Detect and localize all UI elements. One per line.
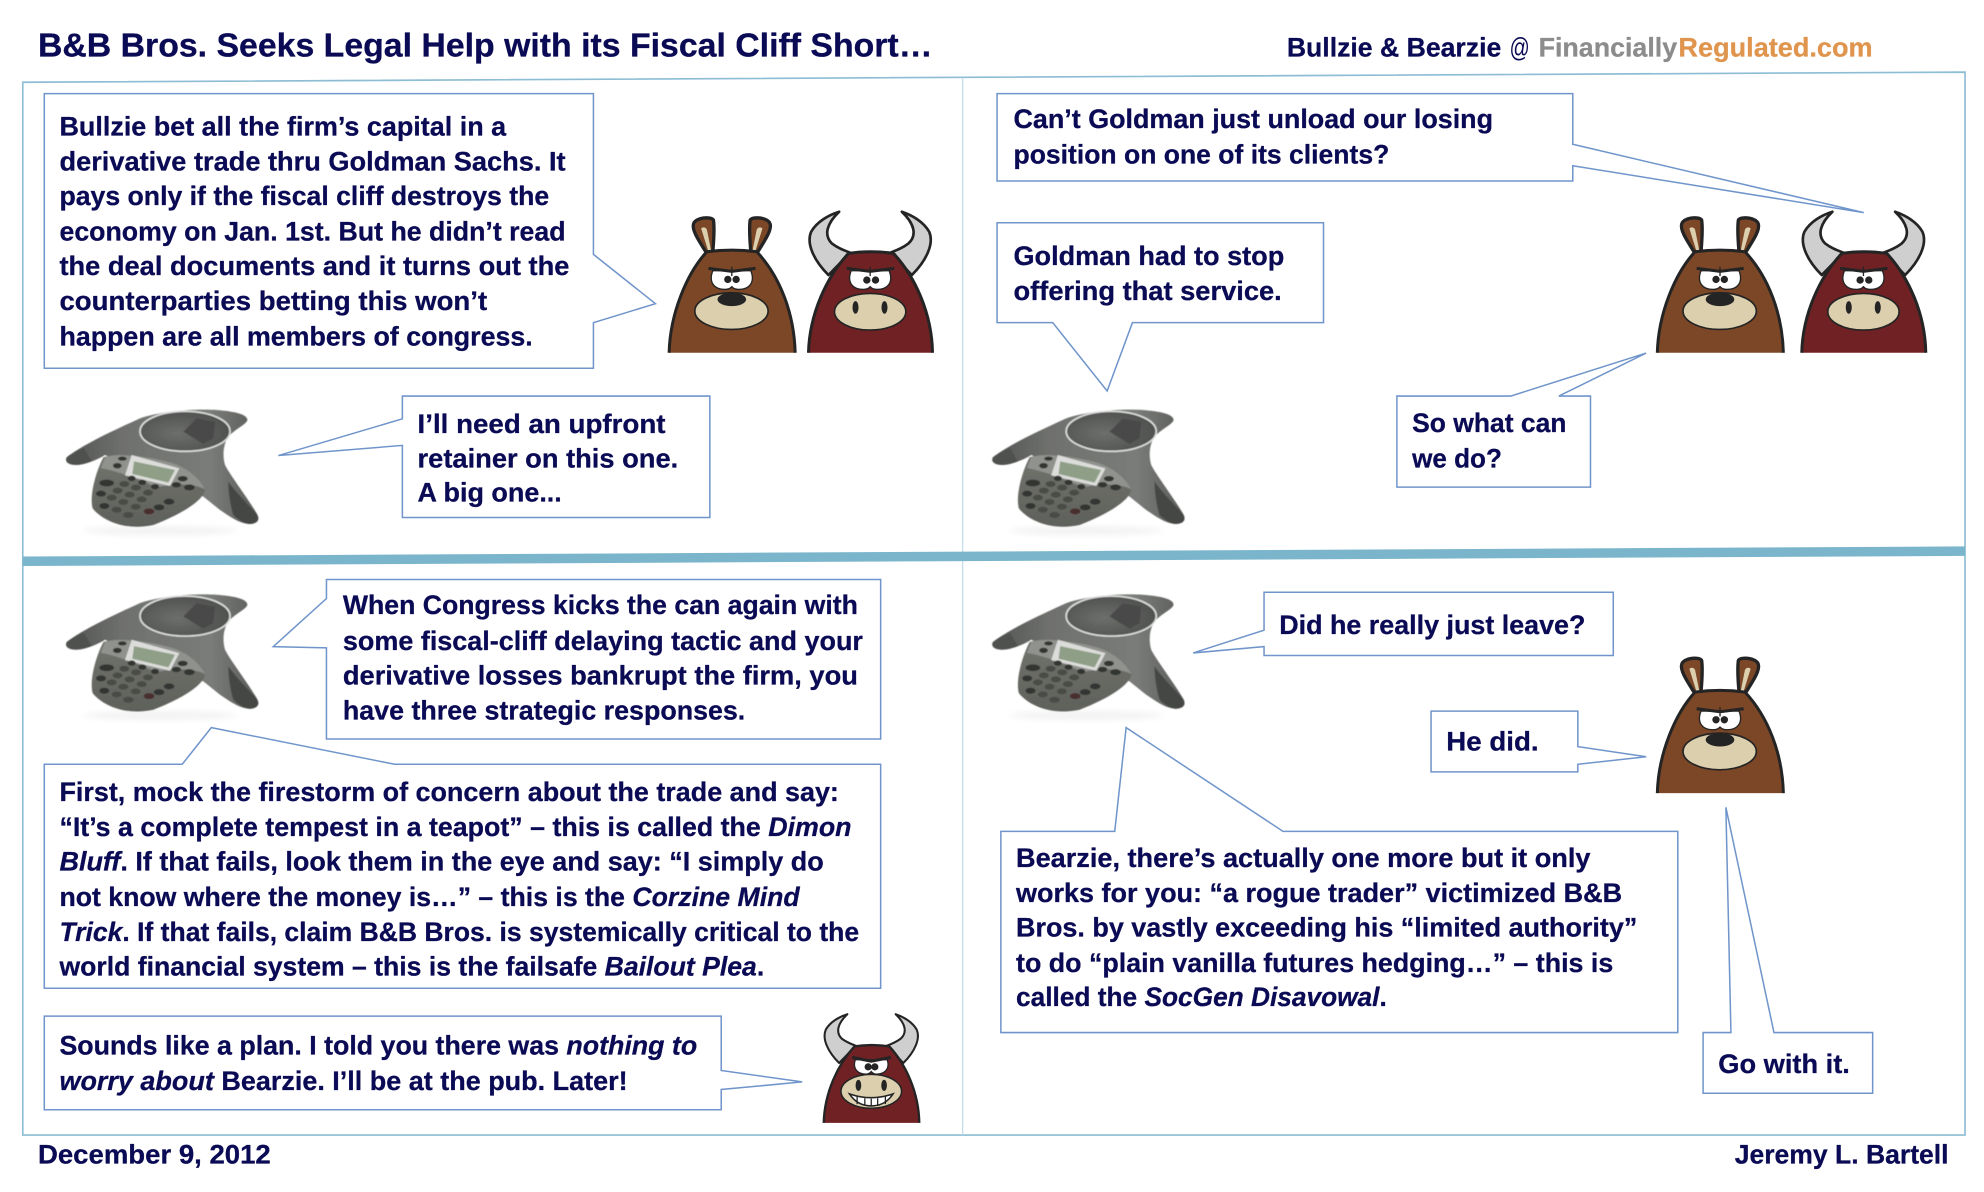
footer author: Jeremy L. Bartell	[1735, 1140, 1949, 1170]
speech bubble: Bullzie's bet: Bullzie bet all the firm’s capital in a	[59, 111, 506, 141]
speech bubble: strategic responses: not know where the money is…” – this is the Corzine Mind	[59, 882, 800, 912]
icon: conference phone	[992, 594, 1185, 720]
speech bubble: Bullzie's bet: happen are all members of congress.	[59, 321, 533, 351]
speech bubble: stopped service: offering that service.	[1014, 276, 1282, 306]
footer date: December 9, 2012	[38, 1140, 271, 1170]
speech bubble: strategic responses	[44, 728, 881, 988]
speech bubble: Bullzie's bet: counterparties betting this won’t	[59, 286, 487, 316]
speech bubble: rogue trader: works for you: “a rogue trader” victimized B&B	[1015, 878, 1622, 908]
speech bubble: go with it: Go with it.	[1718, 1049, 1850, 1079]
site credit: Regulated.com	[1678, 32, 1873, 62]
speech bubble: strategic responses: world financial system – this is the failsafe Bailout Plea.	[58, 952, 764, 982]
panel: bottom left	[44, 580, 919, 1123]
speech bubble: stopped service: Goldman had to stop	[1014, 241, 1284, 271]
speech bubble: rogue trader	[1001, 728, 1678, 1033]
speech bubble: unload position	[997, 94, 1864, 213]
icon: conference phone	[66, 410, 258, 535]
speech bubble: three responses: derivative losses bankrupt the firm, you	[343, 661, 858, 691]
speech bubble: did he leave: Did he really just leave?	[1279, 610, 1585, 640]
speech bubble: three responses: When Congress kicks the can again with	[343, 590, 858, 620]
speech bubble: rogue trader: called the SocGen Disavowal.	[1016, 982, 1387, 1012]
speech bubble: Bullzie's bet	[44, 94, 655, 368]
site credit	[1287, 32, 1873, 62]
speech bubble: Bullzie's bet: economy on Jan. 1st. But he didn’t read	[59, 216, 566, 246]
speech bubble: retainer	[278, 396, 710, 518]
speech bubble: retainer: A big one...	[418, 478, 562, 508]
panel divider	[962, 78, 964, 1135]
panel: bottom right	[992, 592, 1873, 1093]
icon: bear	[1657, 658, 1783, 793]
icon: conference phone	[66, 594, 258, 720]
speech bubble: three responses: have three strategic responses.	[343, 695, 745, 725]
speech bubble: what can we do: So what can	[1412, 408, 1566, 438]
speech bubble: Bullzie's bet: the deal documents and it turns out the	[59, 251, 569, 281]
horizontal panel divider	[23, 546, 1965, 566]
speech bubble: strategic responses: “It’s a complete tempest in a teapot” – this is called the Dimon	[59, 812, 852, 842]
icon: bear	[669, 218, 795, 353]
speech bubble: strategic responses: Bluff. If that fails, look them in the eye and say: “I simply do	[59, 847, 824, 877]
speech bubble: sounds like a plan: Sounds like a plan. I told you there was nothing to	[59, 1030, 697, 1060]
icon: bear	[1657, 218, 1783, 353]
panel: top left	[44, 94, 933, 535]
speech bubble: three responses: some fiscal-cliff delaying tactic and your	[343, 626, 863, 656]
speech bubble: what can we do	[1397, 353, 1646, 487]
icon: conference phone	[992, 410, 1185, 535]
site credit: @	[1510, 32, 1530, 62]
speech bubble: rogue trader: Bearzie, there’s actually one more but it only	[1016, 843, 1591, 873]
speech bubble: rogue trader: to do “plain vanilla futures hedging…” – this is	[1016, 948, 1613, 978]
speech bubble: what can we do: we do?	[1411, 443, 1502, 473]
speech bubble: retainer: retainer on this one.	[418, 444, 678, 474]
panel: top right	[992, 94, 1926, 535]
speech bubble: go with it	[1703, 807, 1873, 1093]
speech bubble: did he leave	[1193, 592, 1613, 655]
icon: bull	[808, 212, 933, 353]
icon: bull	[1802, 212, 1926, 353]
speech bubble: Bullzie's bet: derivative trade thru Goldman Sachs. It	[59, 146, 566, 176]
speech bubble: Bullzie's bet: pays only if the fiscal cliff destroys the	[59, 181, 549, 211]
speech bubble: strategic responses: Trick. If that fails, claim B&B Bros. is systemically critical to the	[59, 917, 859, 947]
speech bubble: strategic responses: First, mock the firestorm of concern about the trade and say:	[59, 777, 839, 807]
speech bubble: he did: He did.	[1446, 726, 1539, 756]
speech bubble: sounds like a plan: worry about Bearzie. I’ll be at the pub. Later!	[59, 1066, 628, 1096]
speech bubble: he did	[1431, 711, 1646, 772]
speech bubble: stopped service	[997, 223, 1324, 391]
speech bubble: unload position: Can’t Goldman just unload our losing	[1014, 104, 1493, 134]
title: B&B Bros. Seeks Legal Help with its Fiscal Cliff Short…	[38, 26, 933, 63]
site credit: Bullzie & Bearzie	[1287, 32, 1501, 62]
speech bubble: unload position: position on one of its clients?	[1014, 140, 1389, 170]
speech bubble: rogue trader: Bros. by vastly exceeding his “limited authority”	[1016, 912, 1637, 942]
icon: smiling bull	[824, 1014, 919, 1123]
speech bubble: three responses	[273, 580, 881, 739]
speech bubble: retainer: I’ll need an upfront	[418, 409, 666, 439]
site credit: Financially	[1539, 32, 1677, 62]
speech bubble: sounds like a plan	[44, 1016, 802, 1110]
